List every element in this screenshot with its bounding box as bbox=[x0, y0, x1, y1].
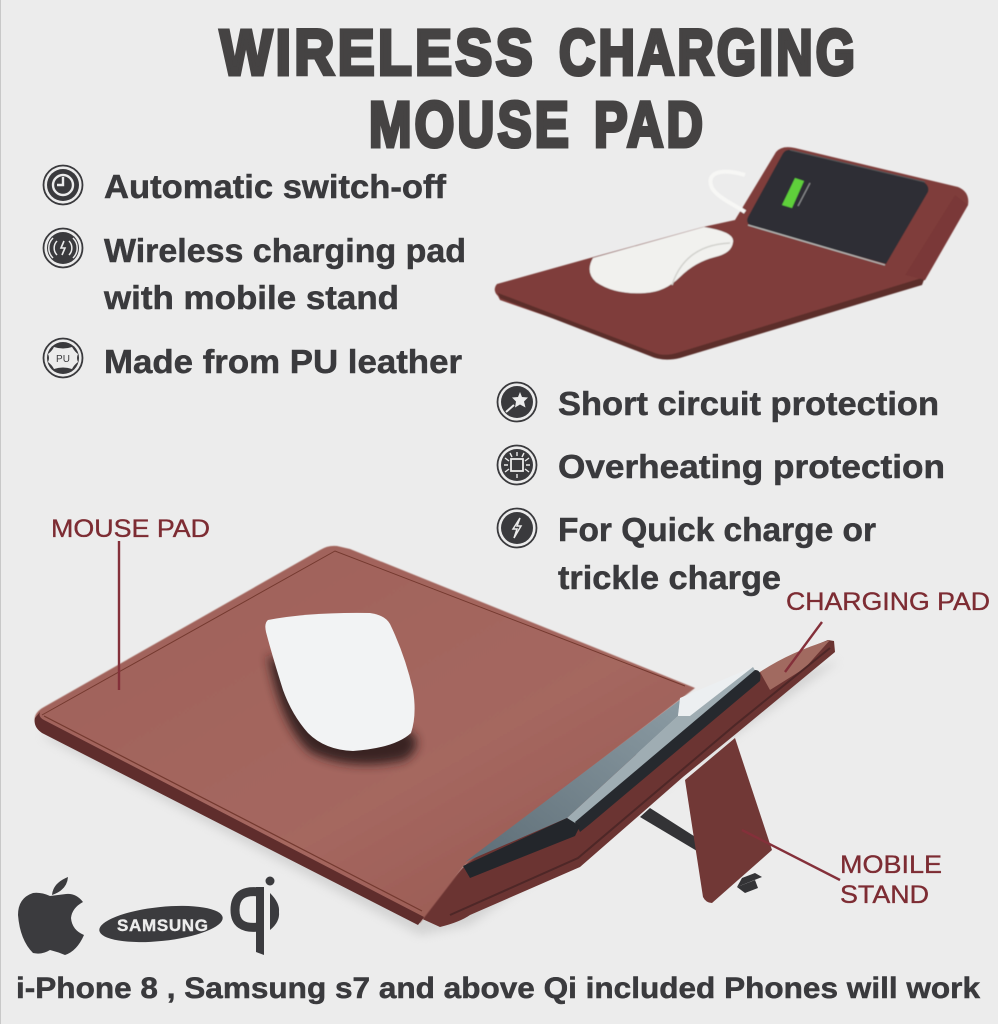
icon: chip heat bbox=[498, 446, 536, 484]
phone bbox=[463, 667, 760, 878]
label: charging pad: CHARGING PAD bbox=[786, 588, 990, 616]
title: MOUSE bbox=[369, 88, 572, 160]
hinge and charging wing bbox=[418, 640, 835, 927]
product photo: folded mouse pad with phone bbox=[495, 147, 968, 360]
icon: lightning bbox=[498, 508, 536, 548]
label: charging pad bbox=[785, 588, 990, 672]
logo: samsung: SAMSUNG bbox=[117, 916, 208, 935]
feature: quick or trickle charge: For Quick charge or bbox=[558, 511, 876, 548]
title: WIRELESS bbox=[220, 16, 536, 88]
feature: wireless charging pad bbox=[44, 228, 466, 316]
mouse bbox=[590, 227, 733, 293]
feature: automatic switch-off: Automatic switch-off bbox=[104, 168, 447, 205]
feature: wireless charging pad: with mobile stand bbox=[103, 279, 399, 316]
compatibility note: i-Phone 8 , Samsung s7 and above Qi included Phones will work bbox=[16, 972, 980, 1005]
feature: overheating protection: Overheating protection bbox=[558, 448, 945, 485]
label: mobile stand: MOBILE bbox=[840, 851, 942, 879]
cable bbox=[710, 172, 745, 212]
icon: PU hide bbox=[44, 338, 82, 378]
logo: samsung bbox=[98, 901, 224, 947]
icon: wireless charge bbox=[44, 228, 82, 268]
product photo: mouse pad on stand bbox=[35, 546, 840, 935]
icon: power timer bbox=[44, 166, 82, 204]
mouse shadow bbox=[268, 655, 417, 764]
logo: qi bbox=[235, 876, 279, 955]
label: mobile stand: STAND bbox=[840, 881, 929, 909]
feature: wireless charging pad: Wireless charging pad bbox=[104, 232, 466, 269]
battery indicator bbox=[782, 178, 804, 208]
stand bbox=[685, 738, 772, 903]
feature: quick or trickle charge: trickle charge bbox=[558, 559, 781, 596]
label: mouse pad: MOUSE PAD bbox=[51, 515, 210, 543]
mouse bbox=[265, 613, 415, 751]
icon: PU hide: PU bbox=[56, 354, 70, 365]
icon: spark bbox=[498, 382, 536, 422]
stand strap bbox=[640, 808, 697, 851]
feature: quick or trickle charge bbox=[498, 508, 876, 596]
title: PAD bbox=[594, 88, 706, 160]
title bbox=[220, 16, 858, 160]
phone bbox=[747, 150, 928, 264]
title: CHARGING bbox=[559, 16, 858, 88]
label: mobile stand bbox=[742, 830, 942, 909]
mouse pad surface bbox=[35, 546, 695, 923]
logo: apple bbox=[18, 877, 84, 955]
feature: PU leather: Made from PU leather bbox=[104, 343, 462, 380]
feature: short circuit protection: Short circuit protection bbox=[558, 385, 939, 422]
